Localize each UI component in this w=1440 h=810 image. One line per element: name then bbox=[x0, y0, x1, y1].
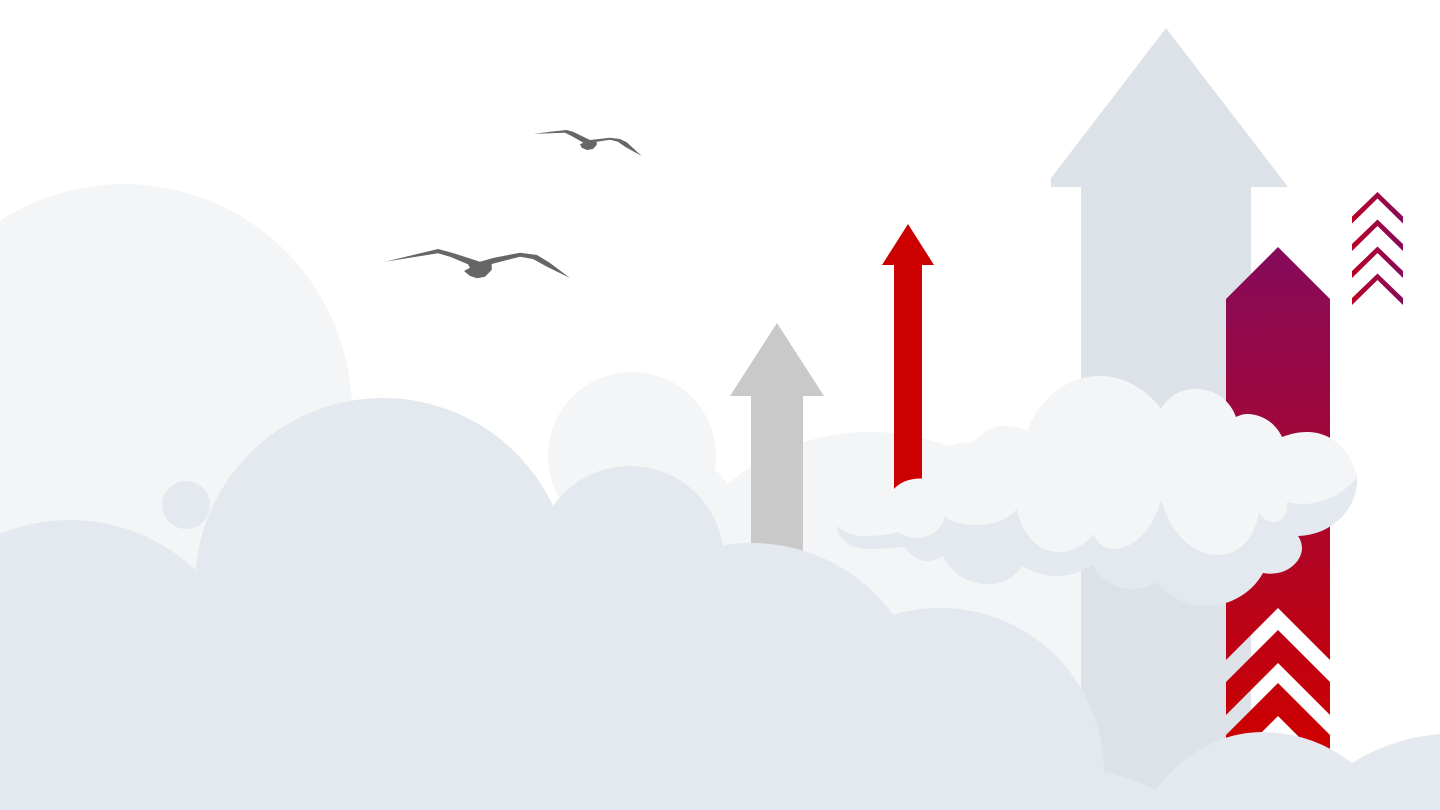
cloud: floating cloud highlight bbox=[836, 376, 1357, 555]
arrow: gradient arrow with chevrons bbox=[1226, 247, 1330, 768]
icon: large seagull bbox=[385, 249, 570, 278]
icon: small seagull bbox=[534, 130, 642, 156]
arrow: grey arrow bbox=[730, 323, 824, 600]
icon: small chevrons bbox=[1352, 192, 1403, 305]
arrow: large pale blue arrow bbox=[1051, 28, 1288, 810]
arrow: red arrow bbox=[882, 224, 934, 510]
cloud: foreground cloud bank bbox=[0, 398, 1440, 810]
background: pale cloud shapes bbox=[0, 184, 1090, 810]
cloud: floating cloud shadow bbox=[836, 477, 1357, 606]
